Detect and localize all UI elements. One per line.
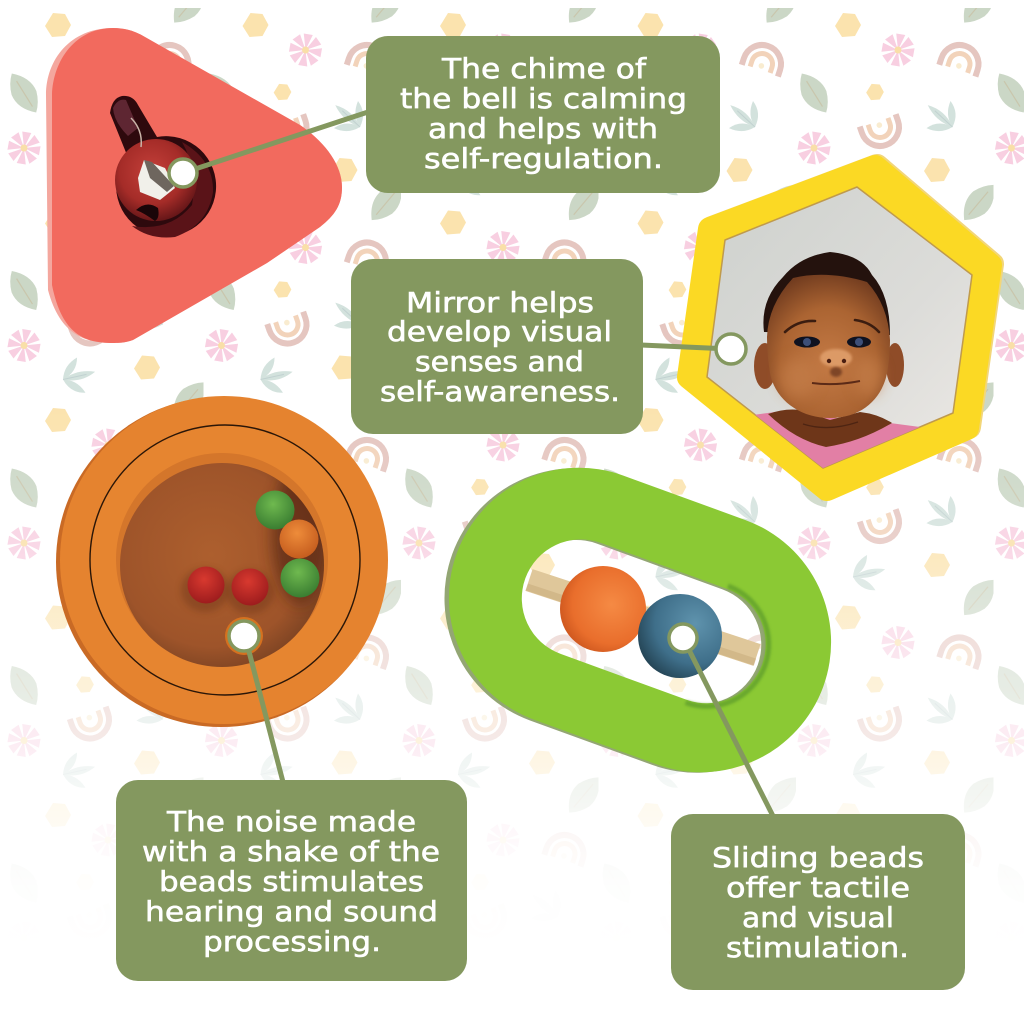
mirror [707,187,972,468]
callout: beads noise: The noise made [166,805,416,838]
callout: mirror: develop visual [387,315,612,348]
connector: sliding beads callout [669,624,773,816]
toy: coral triangle with bell [46,28,342,343]
callout: beads noise: hearing and sound [145,895,438,928]
callout: bell: self-regulation. [424,142,663,175]
callout: bell: the bell is calming [400,82,687,115]
toy: yellow hexagon mirror [689,166,992,489]
wooden rod [527,580,757,662]
callout: sliding beads: Sliding beads [712,841,924,874]
callout: sliding beads: offer tactile [726,871,910,904]
bell hole [110,96,216,236]
callout: sliding beads [671,814,965,990]
callout: sliding beads: stimulation. [726,931,909,964]
callout: beads noise: beads stimulates [159,865,424,898]
connector: bell callout [169,112,368,187]
baby reflection [753,252,920,470]
callout: bell: The chime of [441,52,647,85]
callout: mirror: senses and [415,345,584,378]
callout: sliding beads: and visual [742,901,894,934]
orange bead [560,566,646,652]
bead chamber [116,453,328,665]
blue bead [638,594,722,678]
toy: orange bead drum [56,396,388,727]
callout: mirror [351,259,643,434]
connector: beads noise callout [229,621,283,782]
bell [115,139,197,221]
callout: beads noise: with a shake of the [142,835,440,868]
callout: beads noise: processing. [203,925,381,958]
callout: mirror: self-awareness. [380,375,620,408]
beads [181,568,229,612]
callout: mirror: Mirror helps [406,286,594,319]
callout: beads noise [116,780,467,981]
callout: bell: and helps with [428,112,658,145]
toy: green oval with sliding beads [408,430,868,811]
connector: mirror callout [641,334,746,364]
callout: bell [366,36,720,193]
